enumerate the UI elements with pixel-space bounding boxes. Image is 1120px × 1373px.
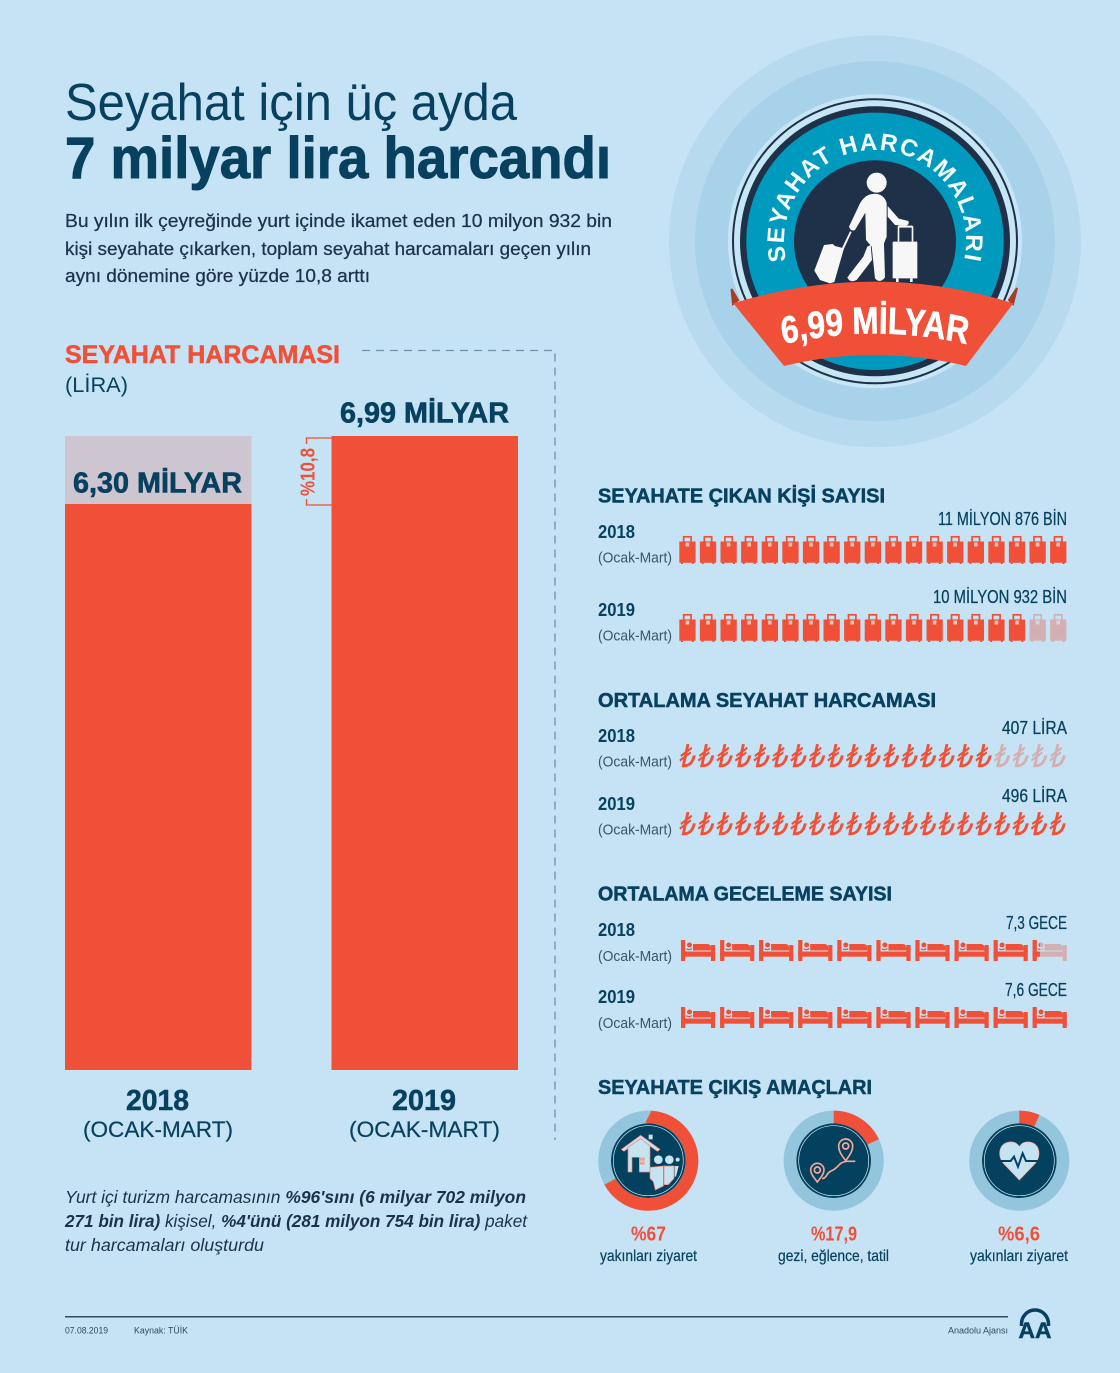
axis label 2019: (OCAK-MART) [349,1117,500,1142]
row 2019: 10 MİLYON 932 BİN [933,587,1067,607]
badge: seyahat harcamaları [669,36,1081,447]
icons: beds 2019 [681,1007,1067,1028]
ribbon [730,282,1018,366]
icons: suitcases 2019 [679,615,1066,642]
bar 2018: 6,30 MİLYAR [73,468,242,500]
row 2018: 2018 [598,726,635,746]
panel: average nights [598,882,1067,1032]
logo: AA: AA [1018,1318,1052,1343]
donut: 67 percent: yakınları ziyaret [600,1248,697,1265]
row 2018 [598,509,1067,566]
intro text [65,210,612,286]
bar 2019 [332,398,518,1070]
row 2018: 407 LİRA [1002,718,1067,738]
row 2019: 7,6 GECE [1005,980,1067,1000]
row 2019: (Ocak-Mart) [598,1016,672,1032]
icon: route with pins [811,1139,855,1182]
intro text: kişi seyahate çıkarken, toplam seyahat harcamaları geçen yılın [65,238,591,259]
panel: average nights: ORTALAMA GECELEME SAYISI [598,882,892,906]
row 2018: (Ocak-Mart) [598,550,672,566]
row 2018: 7,3 GECE [1006,913,1067,933]
row 2019 [598,980,1067,1032]
bar chart heading [65,341,340,397]
row 2019: (Ocak-Mart) [598,628,672,644]
bracket: increase [298,438,332,505]
axis label 2018: 2018 [126,1085,189,1117]
intro text: Bu yılın ilk çeyreğinde yurt içinde ikamet eden 10 milyon 932 bin [65,210,612,231]
axis label 2019: 2019 [392,1085,456,1117]
footer [65,1310,1052,1343]
axis label 2018: (OCAK-MART) [83,1117,233,1142]
donut: 6.6 percent: %6,6 [998,1224,1040,1246]
note text: tur harcamaları oluşturdu [65,1235,264,1255]
axis label 2019 [349,1085,500,1142]
donut: 67 percent [600,1117,697,1265]
bar chart heading: SEYAHAT HARCAMASI [65,341,340,369]
donut: 6.6 percent [970,1117,1068,1265]
bar chart: 2018 vs 2019 [65,398,518,1142]
donut: 17.9 percent: %17,9 [811,1224,857,1246]
donut: 17.9 percent [778,1117,889,1265]
footer: 07.08.2019 [65,1326,108,1336]
donut: 67 percent: %67 [631,1224,666,1246]
intro text: aynı dönemine göre yüzde 10,8 arttı [65,265,370,286]
bar 2018 [65,436,252,1070]
row 2018: (Ocak-Mart) [598,754,672,770]
note text: Yurt içi turizm harcamasının %96'sını (6 milyar 702 milyon [65,1187,526,1207]
footer: Anadolu Ajansı [948,1326,1008,1336]
title: 7 milyar lira harcandı [65,126,611,191]
panel: travel purposes: SEYAHATE ÇIKIŞ AMAÇLARI [598,1076,872,1099]
note text [64,1187,528,1255]
row 2018: (Ocak-Mart) [598,949,672,965]
row 2019: 496 LİRA [1002,786,1067,806]
panel: travellers [598,484,1067,644]
icons: beds 2018 [681,940,1067,961]
row 2019 [598,786,1070,843]
curved label: SEYAHAT HARCAMALARI [767,134,983,262]
bracket: increase: %10,8 [298,448,320,496]
note text: 271 bin lira) kişisel, %4'ünü (281 milyon 754 bin lira) paket [64,1211,528,1231]
row 2019 [598,587,1067,644]
panel: travel purposes [598,1076,1068,1265]
bar chart heading: (LİRA) [65,374,128,397]
icons: suitcases 2018 [679,537,1066,564]
row 2018 [598,718,1070,775]
row 2019: (Ocak-Mart) [598,822,672,838]
bar 2019: 6,99 MİLYAR [340,398,509,430]
ribbon: 6,99 MİLYAR [782,300,968,346]
axis label 2018 [83,1085,233,1142]
icon: heart with pulse [1000,1142,1039,1180]
row 2018: ₺₺₺₺ [991,739,1070,775]
footer: Kaynak: TÜİK [134,1326,188,1336]
title [65,74,611,191]
panel: average spending: ORTALAMA SEYAHAT HARCAMASI [598,689,936,712]
row 2019: 2019 [598,600,635,620]
panel: travellers: SEYAHATE ÇIKAN KİŞİ SAYISI [598,484,885,508]
row 2019: ₺₺₺₺₺₺₺₺₺₺₺₺₺₺₺₺₺₺₺₺₺ [676,807,1070,843]
row 2019: 2019 [598,794,635,814]
row 2018: 11 MİLYON 876 BİN [938,509,1067,529]
donut: 6.6 percent: yakınları ziyaret [970,1248,1068,1265]
row 2018: ₺₺₺₺₺₺₺₺₺₺₺₺₺₺₺₺₺ [676,739,996,775]
row 2019: 2019 [598,987,635,1007]
title: Seyahat için üç ayda [65,74,517,132]
panel: average spending [598,689,1070,843]
row 2018: 2018 [598,920,635,940]
row 2018 [598,913,1067,965]
row 2018: 2018 [598,522,635,542]
donut: 17.9 percent: gezi, eğlence, tatil [778,1248,889,1265]
icon: traveller with suitcases [814,173,917,283]
icon: house and family [621,1135,680,1190]
